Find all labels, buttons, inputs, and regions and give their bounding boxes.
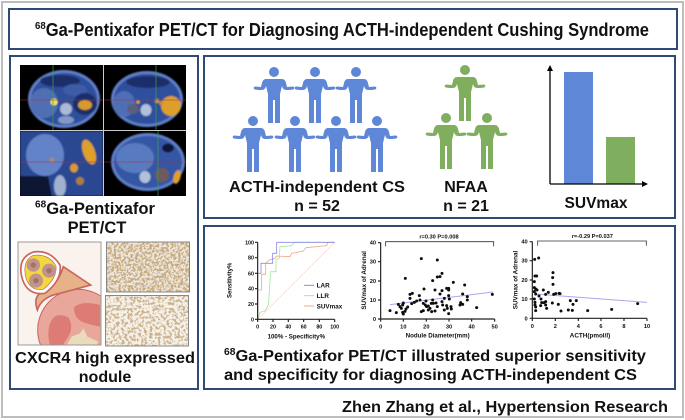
scatter plot: SUVmax vs ACTH: 30	[521, 259, 528, 265]
title: Ga-Pentixafor PET/CT for Diagnosing ACTH-independent Cushing Syndrome	[46, 20, 649, 40]
title: 68	[35, 20, 46, 32]
illustration: adrenal nodule and kidney	[18, 242, 102, 346]
scatter plot: SUVmax vs ACTH: SUVmax of Adrenal	[512, 251, 519, 309]
label: NFAA n = 21	[443, 179, 489, 215]
scatter plot: SUVmax vs ACTH: 10	[644, 324, 650, 330]
scatter plot: SUVmax vs nodule diameter: r=0.30 P=0.008	[419, 235, 459, 241]
caption: CXCR4 high expressed nodule: nodule	[79, 369, 131, 386]
ROC chart: 80	[316, 324, 322, 330]
ROC chart: Sensitivity%	[227, 262, 233, 298]
scatter plot: SUVmax vs nodule diameter: SUVmax of Adrenal	[361, 251, 368, 310]
label: ACTH-independent CS n = 52	[229, 179, 405, 215]
panel: patient groups and SUVmax	[204, 56, 675, 218]
scatter plot: SUVmax vs nodule diameter: 40	[469, 324, 475, 330]
scatter plot: SUVmax vs nodule diameter: 40	[370, 241, 376, 247]
icon group: NFAA patients	[426, 65, 507, 169]
scatter plot: SUVmax vs nodule diameter: 30	[370, 260, 376, 266]
ROC chart: 0	[256, 324, 259, 330]
conclusion text: Ga-Pentixafor PET/CT illustrated superior sensitivity	[235, 348, 646, 365]
scatter plot: SUVmax vs ACTH: 0	[525, 316, 528, 322]
label: ACTH-independent CS n = 52: n = 52	[294, 198, 340, 215]
scatter plot: SUVmax vs nodule diameter: 10	[370, 298, 376, 304]
ROC chart: 40	[248, 287, 254, 293]
ROC chart	[227, 240, 343, 340]
heading: 68Ga-Pentixafor PET/CT: Ga-Pentixafor	[46, 200, 156, 218]
heading: 68Ga-Pentixafor PET/CT: PET/CT	[68, 219, 126, 237]
scatter plot: SUVmax vs nodule diameter: 0	[373, 317, 376, 323]
label: NFAA n = 21: n = 21	[443, 198, 489, 215]
scatter plot: SUVmax vs ACTH: r=-0.29 P=0.037	[572, 234, 613, 240]
ROC chart: 80	[248, 256, 254, 262]
scatter plot: SUVmax vs ACTH: 10	[521, 297, 528, 303]
conclusion text	[224, 347, 646, 384]
ROC chart: 20	[270, 324, 276, 330]
ROC chart: 100	[330, 324, 339, 330]
scatter plot: SUVmax vs ACTH: 2	[554, 324, 557, 330]
ROC chart: 20	[248, 302, 254, 308]
conclusion text: 68	[224, 347, 236, 358]
heading: 68Ga-Pentixafor PET/CT	[35, 200, 156, 237]
ROC chart: 0	[251, 317, 254, 323]
scatter plot: SUVmax vs ACTH: 40	[521, 240, 528, 246]
caption: CXCR4 high expressed nodule	[15, 350, 195, 386]
ROC chart: 100% - Specificity%	[268, 333, 326, 340]
ROC chart: 100	[245, 240, 254, 246]
micrograph: lower CXCR4 stain	[106, 296, 188, 346]
scatter plot: SUVmax vs nodule diameter: 50	[492, 324, 498, 330]
label: ACTH-independent CS n = 52: ACTH-independent CS	[229, 179, 405, 196]
caption: CXCR4 high expressed nodule: CXCR4 high expressed	[15, 350, 195, 367]
scatter plot: SUVmax vs ACTH: 6	[599, 324, 603, 330]
scatter plot: SUVmax vs ACTH	[512, 234, 650, 339]
title	[9, 9, 677, 49]
ROC chart: 40	[285, 324, 291, 330]
panel: diagnostic performance charts	[204, 226, 675, 389]
scatter plot: SUVmax vs nodule diameter: 0	[379, 324, 382, 330]
bar chart: SUVmax: SUVmax	[565, 195, 628, 212]
scatter plot: SUVmax vs nodule diameter: 20	[423, 324, 429, 330]
scatter plot: SUVmax vs ACTH: ACTH(pmol/l)	[570, 332, 610, 339]
PET/CT scan images	[20, 65, 186, 197]
scatter plot: SUVmax vs ACTH: 0	[531, 324, 534, 330]
icon group: ACTH-independent CS patients	[233, 67, 397, 172]
scatter plot: SUVmax vs nodule diameter: 10	[400, 324, 406, 330]
ROC chart: 60	[301, 324, 307, 330]
scatter plot: SUVmax vs ACTH: 8	[622, 324, 626, 330]
scatter plot: SUVmax vs nodule diameter: 20	[370, 279, 376, 285]
micrograph: upper CXCR4 stain	[106, 242, 190, 292]
citation: Zhen Zhang et al., Hypertension Research	[342, 399, 668, 416]
scatter plot: SUVmax vs nodule diameter: Nodule Diameter(mm)	[406, 333, 470, 340]
scatter plot: SUVmax vs nodule diameter	[361, 235, 498, 340]
ROC chart: LAR	[317, 283, 330, 290]
ROC chart: 60	[248, 271, 254, 277]
scatter plot: SUVmax vs nodule diameter: 30	[446, 324, 452, 330]
ROC chart: LLR	[317, 293, 329, 300]
heading: 68Ga-Pentixafor PET/CT: 68	[35, 200, 47, 210]
scatter plot: SUVmax vs ACTH: 20	[521, 278, 528, 284]
panel: PET/CT imaging and CXCR4 nodule	[10, 56, 198, 389]
scatter plot: SUVmax vs ACTH: 4	[577, 324, 581, 330]
label: NFAA n = 21: NFAA	[444, 179, 488, 196]
conclusion text: and specificity for diagnosing ACTH-independent CS	[224, 367, 637, 384]
ROC chart: SUVmax	[317, 304, 343, 311]
bar chart: SUVmax	[547, 65, 648, 212]
